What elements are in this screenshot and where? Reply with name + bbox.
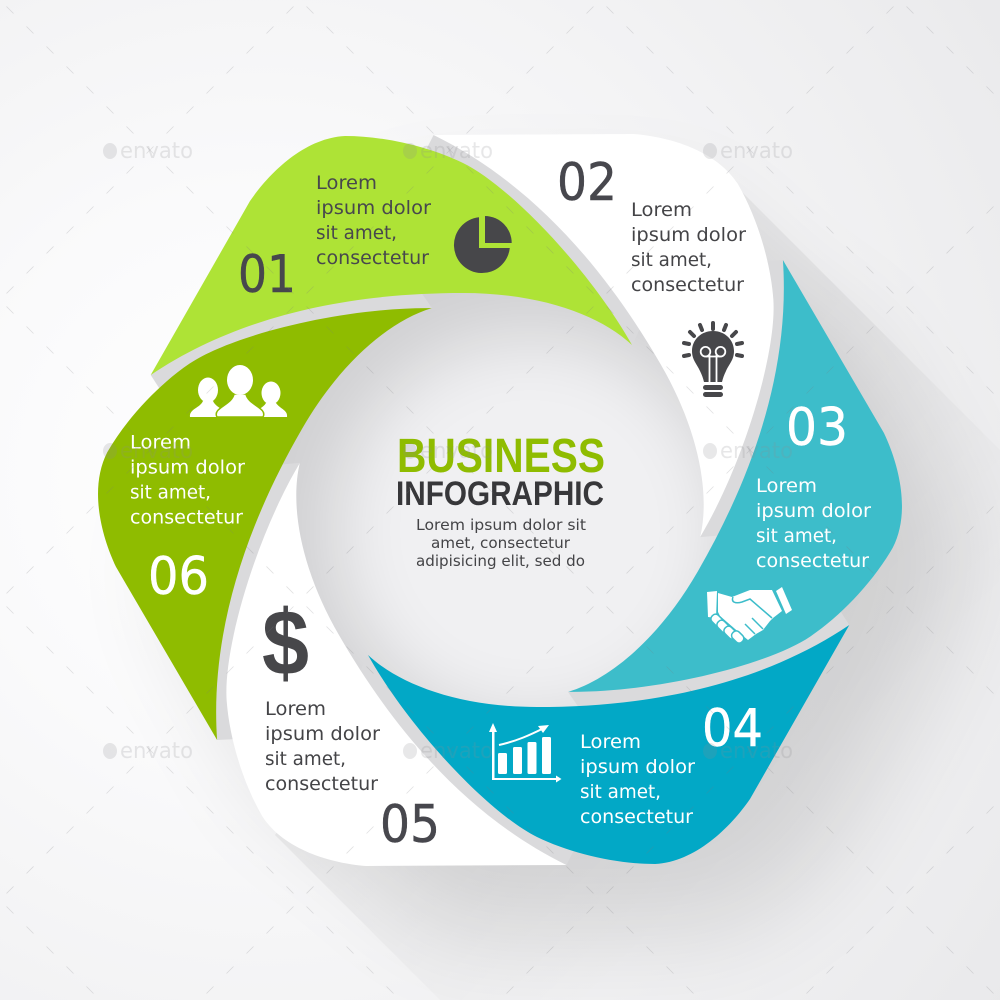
centre soft shadow from upper left — [282, 293, 717, 707]
text 06: Lorem — [130, 432, 191, 454]
centre description: adipisicing elit, sed do — [416, 552, 585, 570]
icon: pie chart — [454, 216, 512, 273]
text 05: Lorem — [265, 698, 326, 720]
envato watermarks: envato — [120, 439, 193, 464]
heading: business: BUSINESS — [397, 430, 605, 483]
text 04: ipsum dolor — [580, 756, 695, 778]
envato watermarks: envato — [120, 139, 193, 164]
number 03: 03 — [786, 398, 848, 458]
centre description: amet, consectetur — [431, 534, 571, 552]
text 02: ipsum dolor — [631, 224, 746, 246]
envato watermarks: envato — [720, 439, 793, 464]
centre description: Lorem ipsum dolor sit — [416, 516, 586, 534]
text 01 — [316, 172, 431, 269]
envato watermarks — [103, 139, 793, 764]
text 01: sit amet, — [316, 222, 397, 244]
panel 03: teal — [542, 260, 990, 796]
text 03: sit amet, — [756, 525, 837, 547]
text 05 — [265, 698, 380, 795]
text 05: consectetur — [265, 773, 378, 795]
panel 04: blue — [368, 625, 849, 864]
envato watermarks: envato — [420, 139, 493, 164]
envato watermarks: envato — [420, 439, 493, 464]
text 02 — [631, 199, 746, 296]
envato watermarks: envato — [120, 739, 193, 764]
text 04: consectetur — [580, 806, 693, 828]
icon: dollar sign: $ — [262, 590, 309, 694]
text 03: consectetur — [756, 550, 869, 572]
text 06 — [130, 432, 245, 528]
text 05: sit amet, — [265, 748, 346, 770]
icon: handshake — [707, 587, 792, 645]
number 05: 05 — [380, 795, 440, 855]
envato watermarks: envato — [720, 139, 793, 164]
number 04: 04 — [702, 699, 763, 759]
soft cast shadow — [166, 202, 969, 933]
text 01: ipsum dolor — [316, 197, 431, 219]
centre title — [396, 430, 605, 570]
text 04: Lorem — [580, 731, 641, 753]
panel 06: green — [10, 204, 458, 740]
text 06: consectetur — [130, 506, 243, 528]
text 04: sit amet, — [580, 781, 661, 803]
text 05: ipsum dolor — [265, 723, 380, 745]
icon: growth chart — [489, 723, 562, 782]
panel 05: white — [119, 448, 566, 985]
long diagonal shadow — [275, 185, 1000, 1000]
text 03: Lorem — [756, 475, 817, 497]
number 06: 06 — [148, 547, 209, 607]
text 04 — [580, 731, 695, 828]
text 03: ipsum dolor — [756, 500, 871, 522]
text 02: consectetur — [631, 274, 744, 296]
text 06: sit amet, — [130, 482, 211, 504]
text 02: sit amet, — [631, 249, 712, 271]
icon: light bulb — [684, 323, 742, 397]
text 06: ipsum dolor — [130, 456, 245, 478]
panel 01: light green — [151, 136, 632, 375]
envato watermarks: envato — [720, 739, 793, 764]
icon: people — [190, 365, 287, 417]
text 01: consectetur — [316, 247, 429, 269]
envato watermarks: envato — [420, 739, 493, 764]
text 02: Lorem — [631, 199, 692, 221]
grey bands between segments — [142, 91, 858, 909]
centre disc — [278, 278, 722, 722]
number 02: 02 — [557, 153, 617, 213]
panel 02: white — [434, 15, 881, 552]
text 03 — [756, 475, 871, 572]
heading: infographic: INFOGRAPHIC — [396, 475, 604, 513]
text 01: Lorem — [316, 172, 377, 194]
number 01: 01 — [238, 245, 296, 305]
centre description — [416, 516, 586, 570]
